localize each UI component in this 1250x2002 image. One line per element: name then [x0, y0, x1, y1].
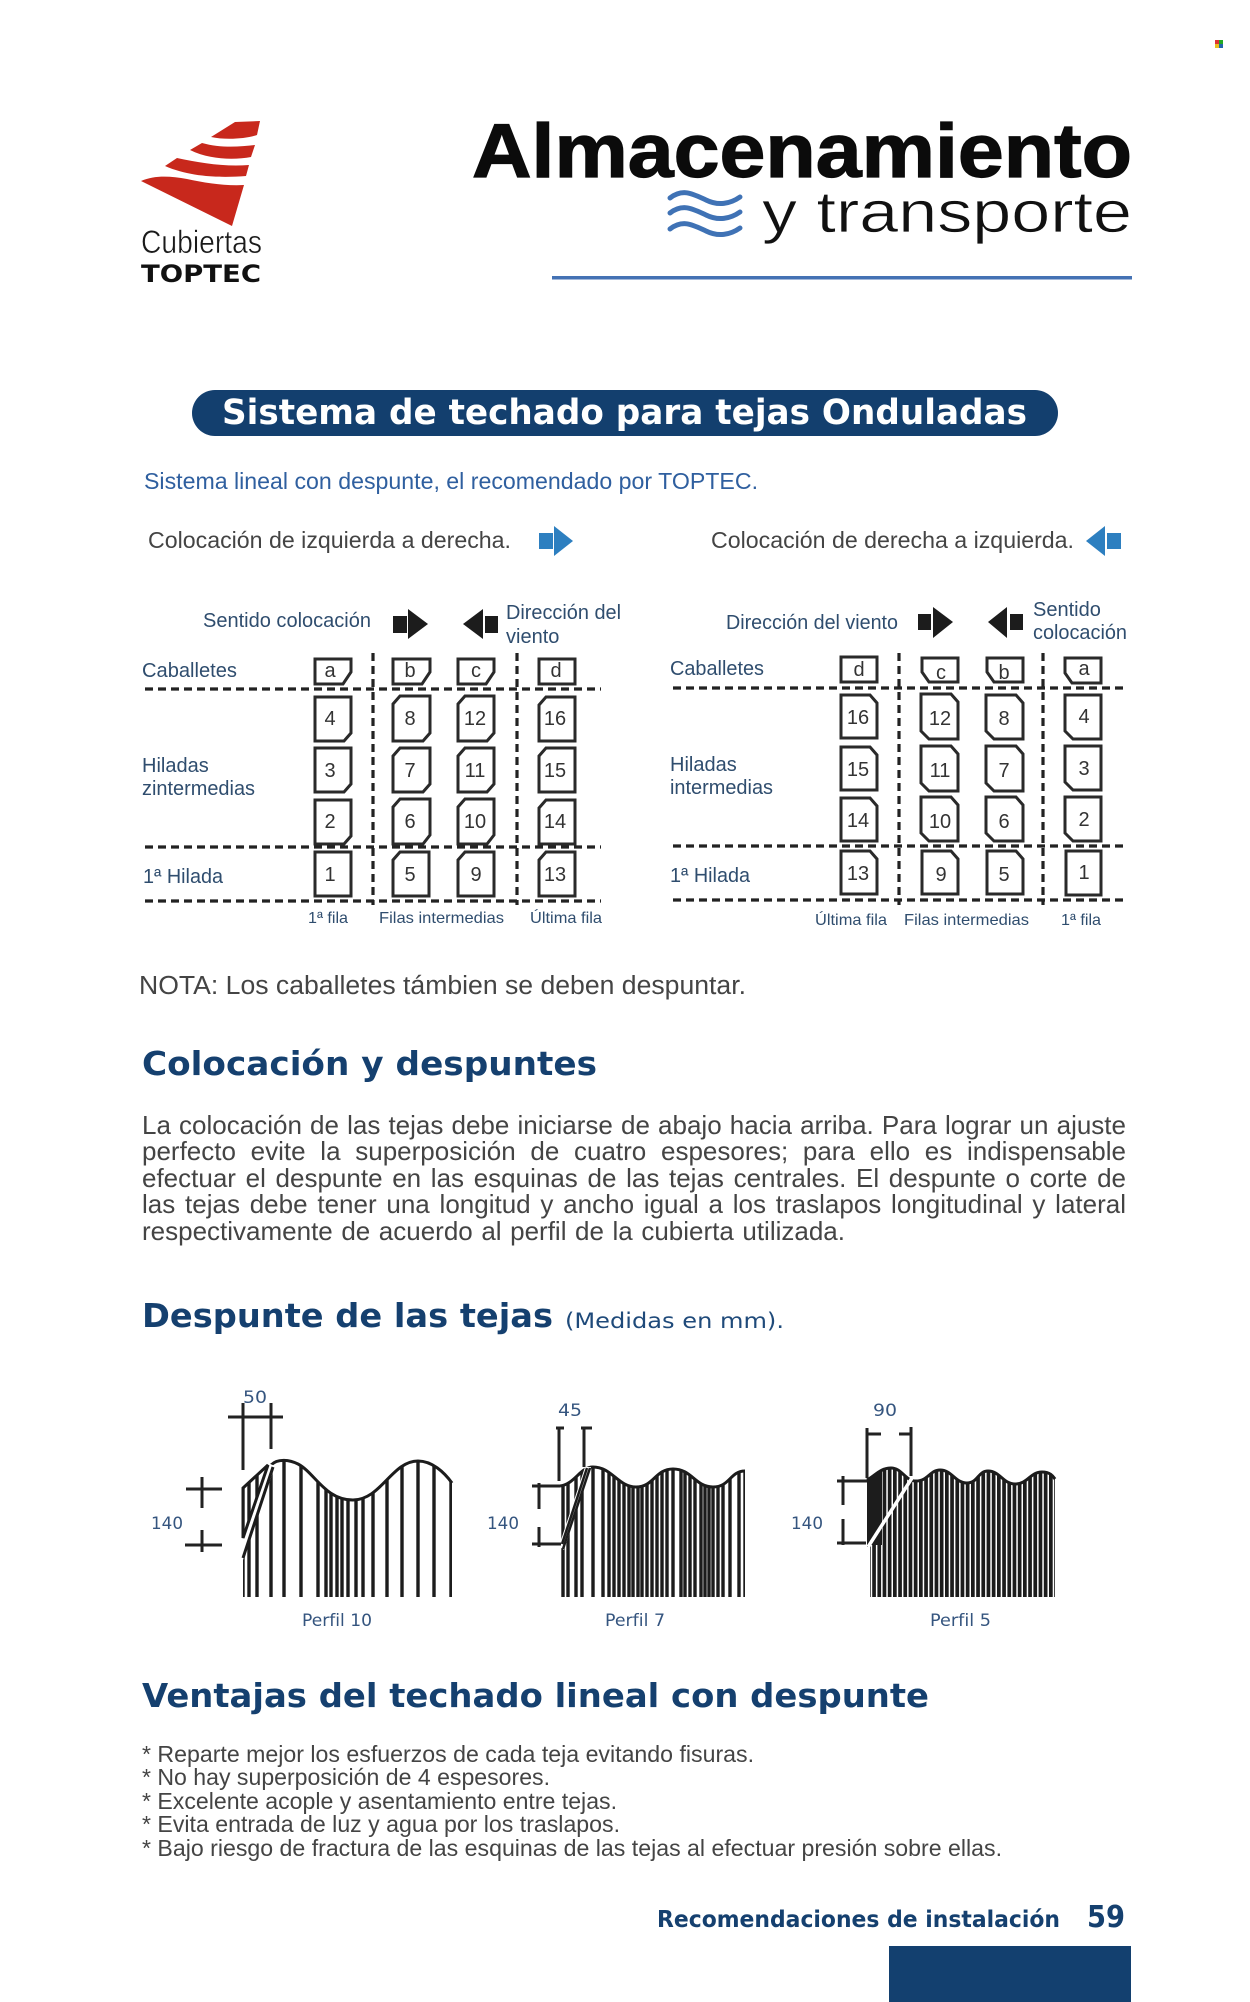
icon: waves: [670, 193, 740, 235]
tile grid: 9: [470, 864, 482, 886]
diagram: left to right: Sentido colocación: [203, 610, 371, 632]
tile grid: d: [853, 659, 865, 681]
diagram: right to left: 1ª fila: [1061, 912, 1101, 929]
diagram: right to left: Dirección del viento: [726, 612, 898, 634]
heading: Despunte de las tejas: [142, 1296, 784, 1335]
tile grid: 5: [404, 864, 416, 886]
tile grid: 6: [998, 811, 1010, 833]
right-to-left placement label: Colocación de derecha a izquierda.: [711, 527, 1074, 553]
paragraph: [142, 1110, 1126, 1246]
paragraph: perfecto evite la superposición de cuatro espesores; para ello es indispensable: [142, 1136, 1126, 1166]
logo: Cubiertas TOPTEC: [141, 121, 262, 288]
tile grid: 7: [404, 760, 416, 782]
tile grid: 2: [324, 811, 336, 833]
tile grid: 1: [324, 864, 336, 886]
title: y transporte: [762, 180, 1132, 245]
logo: Cubiertas TOPTEC: TOPTEC: [141, 260, 261, 288]
diagram: right to left: 1ª Hilada: [670, 865, 751, 887]
diagram: Perfil 10: Perfil 10: [302, 1611, 372, 1631]
tile grid: 5: [998, 864, 1010, 886]
banner heading: Sistema de techado para tejas Onduladas: [222, 393, 1027, 433]
diagram: left to right: 1ª fila: [308, 910, 348, 927]
paragraph: respectivamente de acuerdo al perfil de la cubierta utilizada.: [142, 1216, 845, 1246]
tile grid: [315, 659, 575, 896]
diagram: right to left: Caballetes: [670, 658, 764, 680]
tile grid: 8: [998, 708, 1010, 730]
tile grid: a: [324, 660, 336, 682]
diagram: Perfil 5: 90: [873, 1401, 897, 1421]
diagram: Perfil 10: 140: [151, 1514, 183, 1534]
diagram: right to left: Hiladas: [670, 754, 737, 776]
tile grid: 13: [544, 864, 566, 886]
dimension lines: [532, 1427, 592, 1547]
diagram: right to left: colocación: [1033, 622, 1127, 644]
advantages list: * Evita entrada de luz y agua por los traslapos.: [142, 1811, 620, 1837]
diagram: left to right: [142, 602, 621, 927]
advantages list: * Bajo riesgo de fractura de las esquinas de las tejas al efectuar presión sobre ellas.: [142, 1835, 1002, 1861]
page number: 59: [1087, 1900, 1125, 1935]
tile grid: 4: [1078, 706, 1090, 728]
tile grid: 11: [930, 760, 950, 782]
title rule: [552, 276, 1132, 280]
tile grid: 14: [847, 810, 869, 832]
tile grid: 12: [464, 708, 486, 730]
dimension lines: [185, 1403, 283, 1552]
tile grid: 3: [1078, 758, 1090, 780]
tile grid: 10: [464, 811, 486, 833]
diagram: Perfil 5: Perfil 5: [930, 1611, 991, 1631]
icon: right arrow: [393, 609, 428, 639]
advantages list: * Excelente acople y asentamiento entre tejas.: [142, 1788, 617, 1814]
diagram: right to left: Sentido: [1033, 599, 1101, 621]
print colour mark: [1215, 40, 1223, 48]
diagram: left to right: Última fila: [530, 908, 602, 927]
heading: Despunte de las tejas: Despunte de las tejas: [142, 1296, 553, 1335]
advantages list: * No hay superposición de 4 espesores.: [142, 1764, 550, 1790]
diagram: left to right: Filas intermedias: [379, 910, 504, 927]
icon: blue left arrow: [1086, 526, 1121, 556]
tile grid: b: [998, 662, 1010, 684]
paragraph: La colocación de las tejas debe iniciarse de abajo hacia arriba. Para lograr un ajuste: [142, 1110, 1126, 1140]
dimension lines: [837, 1427, 912, 1545]
diagram: left to right: viento: [506, 626, 559, 648]
logo: Cubiertas TOPTEC: Cubiertas: [141, 224, 262, 260]
tile grid: 12: [929, 708, 951, 730]
icon: left arrow: [988, 607, 1023, 638]
note: NOTA: Los caballetes támbien se deben despuntar.: [139, 972, 746, 1000]
tile grid: c: [471, 660, 481, 682]
advantages list: * Reparte mejor los esfuerzos de cada teja evitando fisuras.: [142, 1741, 754, 1767]
title: [472, 109, 1132, 245]
left-to-right placement label: Colocación de izquierda a derecha.: [148, 527, 511, 553]
tile grid: 3: [324, 760, 336, 782]
heading: Colocación y despuntes: Colocación y despuntes: [142, 1044, 597, 1083]
diagram: Perfil 7: 45: [558, 1401, 582, 1421]
diagram: Perfil 10: [151, 1388, 452, 1631]
paragraph: efectuar el despunte en las esquinas de las tejas centrales. El despunte o corte de: [142, 1163, 1126, 1193]
recommended system text: Sistema lineal con despunte, el recomendado por TOPTEC.: [144, 468, 758, 494]
diagram: Perfil 7: Perfil 7: [605, 1611, 665, 1631]
diagram: right to left: Filas intermedias: [904, 912, 1029, 929]
tile grid: 6: [404, 811, 416, 833]
footer label: Recomendaciones de instalación: [657, 1907, 1060, 1933]
diagram: left to right: Hiladas: [142, 755, 209, 777]
footer block: [889, 1946, 1131, 2002]
diagram: left to right: Dirección del: [506, 602, 621, 624]
diagram: left to right: zintermedias: [142, 778, 255, 800]
diagram: Perfil 5: 140: [791, 1514, 823, 1534]
icon: left arrow: [463, 609, 498, 639]
icon: right arrow: [918, 607, 953, 638]
heading: Despunte de las tejas: (Medidas en mm).: [565, 1309, 784, 1333]
diagram: left to right: 1ª Hilada: [143, 866, 224, 888]
diagram: left to right: Caballetes: [142, 660, 237, 682]
tile grid: a: [1078, 658, 1090, 680]
title: Almacenamiento: [472, 109, 1132, 194]
tile grid: 14: [544, 811, 566, 833]
diagram: Perfil 10: 50: [243, 1388, 267, 1408]
diagram: right to left: intermedias: [670, 777, 773, 799]
icon: blue right arrow: [539, 526, 573, 556]
tile grid: 15: [544, 760, 566, 782]
tile grid: c: [936, 662, 946, 684]
tile grid: 8: [404, 708, 416, 730]
diagram: right to left: [670, 599, 1128, 929]
tile grid: 16: [544, 708, 566, 730]
diagram: Perfil 7: 140: [487, 1514, 519, 1534]
heading: Ventajas: Ventajas del techado lineal con despunte: [142, 1676, 929, 1715]
tile grid: 2: [1078, 809, 1090, 831]
tile grid: 7: [998, 760, 1010, 782]
tile grid: 4: [324, 708, 336, 730]
advantages list: [142, 1741, 1002, 1861]
diagram: Perfil 7: [487, 1401, 745, 1631]
tile grid: 15: [847, 759, 869, 781]
tile grid: d: [550, 660, 562, 682]
tile grid: b: [404, 660, 416, 682]
paragraph: las tejas debe tener una longitud y ancho igual a los traslapos longitudinal y lateral: [142, 1189, 1126, 1219]
tile grid: 16: [847, 707, 869, 729]
tile grid: 10: [929, 811, 951, 833]
tile grid: 1: [1078, 862, 1090, 884]
tile grid: 13: [847, 863, 869, 885]
tile grid: 11: [465, 760, 485, 782]
tile grid: [841, 657, 1101, 895]
diagram: Perfil 5: [791, 1401, 1056, 1631]
diagram: right to left: Última fila: [815, 910, 887, 929]
tile grid: 9: [935, 864, 947, 886]
